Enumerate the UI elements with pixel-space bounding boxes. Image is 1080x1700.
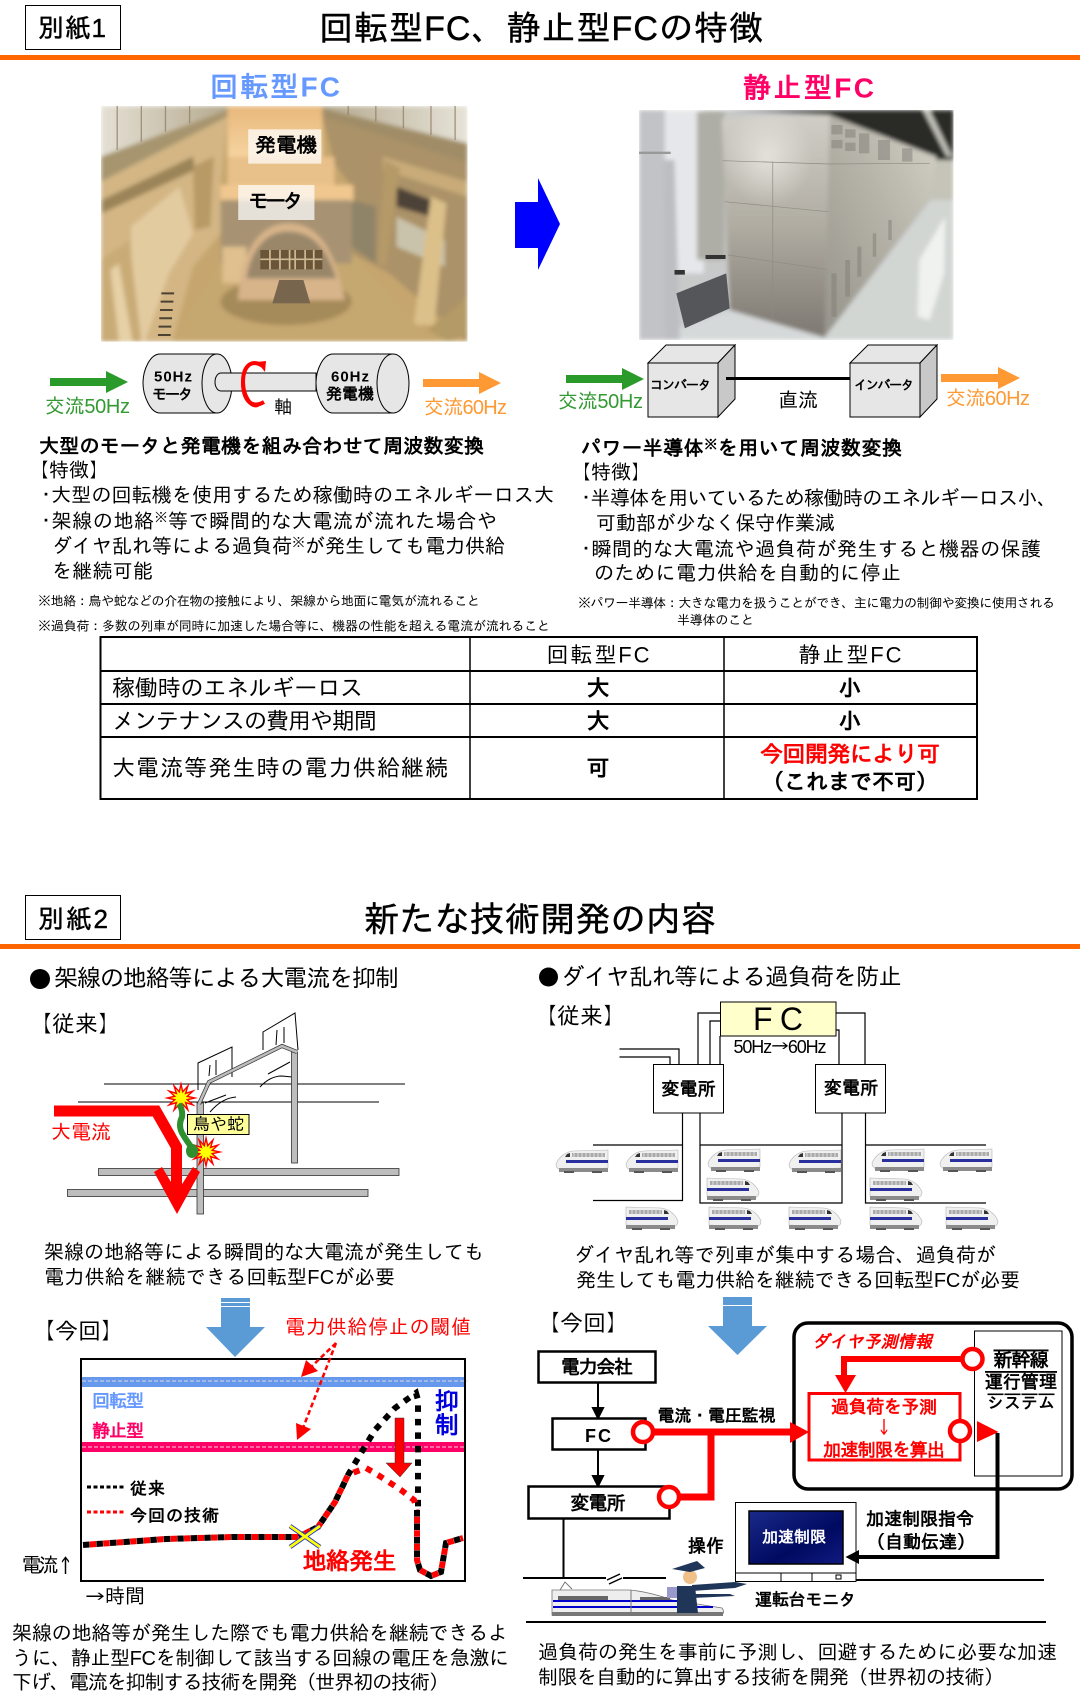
arrow: 60Hz output (941, 367, 1020, 389)
comparison table: 小 (838, 675, 862, 701)
label: power-stop threshold: 電力供給停止の閾値 (285, 1317, 471, 1339)
label: static type: 静止型 (92, 1421, 144, 1441)
text block: rotary FC features: ･架線の地絡 (41, 511, 154, 533)
label: 60Hz generator (326, 368, 374, 404)
sensor circle: FC (633, 1422, 653, 1442)
label: generator: 発電機 (255, 134, 317, 157)
label: acceleration limit command: （自動伝達） (867, 1532, 975, 1552)
photo: static FC cabinets (639, 107, 953, 340)
heading: rotary FC: 回転型FC (210, 72, 340, 102)
power company box (538, 1352, 656, 1382)
monitoring line (653, 1422, 809, 1497)
chart: current over time (81, 1343, 468, 1581)
label: conventional: 【従来】 (29, 1011, 121, 1037)
label: suppression (435, 1388, 459, 1440)
spark: upper (164, 1081, 198, 1115)
text: need for rotary FC (left): 電力供給を継続できる回転型FCが必要 (44, 1267, 395, 1289)
sheet 1 label (26, 6, 120, 50)
control system frame (794, 1323, 1072, 1489)
footnotes: static FC: ※パワー半導体：大きな電力を扱うことができ、主に電力の制御や変換に使用される (578, 596, 1055, 610)
driver figure (667, 1561, 747, 1613)
spark: lower (189, 1135, 223, 1169)
text block: rotary FC features (29, 435, 554, 583)
rails (68, 1168, 399, 1196)
text: technique (left): 下げ、電流を抑制する技術を開発（世界初の技術） (12, 1672, 449, 1694)
arrow: down (left) (206, 1298, 265, 1357)
text block: static FC features: を用いて周波数変換 (718, 437, 902, 460)
label: 60Hz generator: 発電機 (326, 386, 374, 404)
axis label: time: →時間 (85, 1586, 145, 1608)
footnotes: rotary FC: ※地絡：鳥や蛇などの介在物の接触により、架線から地面に電気が流れること (38, 594, 480, 608)
label: generator (248, 129, 321, 164)
panel: Shinkansen operation system: システム (988, 1396, 1054, 1412)
label: acceleration limit command (866, 1509, 975, 1552)
title: new technology development: 新たな技術開発の内容 (364, 900, 716, 940)
sensor circle: prediction (962, 1349, 982, 1369)
text: need for rotary FC (left) (44, 1242, 484, 1289)
substation right: 変電所 (824, 1078, 878, 1098)
text block: rotary FC features: 【特徴】 (29, 460, 109, 482)
substation box (528, 1486, 670, 1518)
diagram: ground fault on catenary (51, 1013, 405, 1214)
text block: rotary FC features: ※ (292, 534, 305, 550)
right section heading: ダイヤ乱れ等による過負荷を防止 (561, 964, 902, 990)
label: 50Hz to 60Hz: 50Hz→60Hz (734, 1037, 826, 1057)
label: driver monitor: 運転台モニタ (755, 1590, 856, 1610)
label: shaft: 軸 (274, 397, 292, 417)
label: rotary type: 回転型 (92, 1391, 144, 1411)
footnotes: static FC (578, 596, 1055, 628)
label: motor (238, 185, 314, 220)
substation left: 変電所 (662, 1079, 716, 1099)
comparison table: 静止型FC (798, 642, 902, 668)
diagram: rotary FC motor-generator (45, 354, 507, 419)
arrow: acceleration limit command (858, 1433, 998, 1557)
band: rotary threshold (82, 1377, 468, 1387)
diagram: overload prediction system (523, 1323, 1072, 1622)
label: AC 50Hz: 交流50Hz (558, 391, 643, 413)
text: technique (left): うに、静止型FCを制御して該当する回線の電圧を急激に (12, 1648, 509, 1670)
footnotes: rotary FC (38, 594, 550, 634)
legend: 今回の技術 (130, 1506, 219, 1526)
label: operation: 操作 (688, 1536, 724, 1556)
snake (179, 1104, 198, 1158)
heading: static FC: 静止型FC (743, 72, 874, 104)
text block: static FC features: ※ (704, 436, 717, 452)
arrow: 50Hz input (566, 368, 644, 390)
legend (87, 1480, 219, 1526)
comparison table: メンテナンスの費用や期間 (112, 708, 377, 734)
text block: rotary FC features: が発生しても電力供給 (305, 536, 505, 558)
label: 50Hz motor (152, 368, 193, 404)
feeder and tracks (523, 1519, 1046, 1622)
motor cylinder (143, 354, 232, 413)
label: DC: 直流 (778, 390, 818, 412)
panel: Shinkansen operation system (974, 1331, 1062, 1476)
label: conventional: 【従来】 (534, 1003, 626, 1029)
label: AC 60Hz: 交流60Hz (946, 388, 1030, 410)
trains (556, 1149, 998, 1230)
label: suppression: 制 (435, 1412, 459, 1440)
label: acceleration limit command: 加速制限指令 (866, 1509, 975, 1529)
text block: rotary FC features: ※ (155, 510, 168, 524)
label: this time (right): 【今回】 (537, 1310, 629, 1336)
comparison table: 大 (586, 675, 610, 701)
inverter cube: インバータ (854, 378, 914, 392)
arrow: prediction info (835, 1359, 962, 1393)
band: static threshold (82, 1442, 465, 1452)
text: technique (right) (538, 1642, 1057, 1689)
label: large current: 大電流 (51, 1122, 111, 1144)
text block: rotary FC features: ダイヤ乱れ等による過負荷 (52, 536, 292, 558)
arrow: output to system (977, 1421, 998, 1442)
red box: predict and calculate: 加速制限を算出 (823, 1440, 945, 1460)
diagram: static FC converter-inverter (558, 345, 1030, 417)
text block: static FC features: パワー半導体 (581, 438, 704, 460)
text: need for rotary FC (left): 架線の地絡等による瞬間的な大電流が発生しても (44, 1242, 484, 1264)
label: ground fault occurs: 地絡発生 (302, 1548, 396, 1576)
axis label: current: 電流↑ (22, 1555, 76, 1577)
text block: rotary FC features: 等で瞬間的な大電流が流れた場合や (168, 511, 497, 533)
generator cylinder (316, 354, 409, 413)
shaft (215, 373, 316, 391)
arrow: down (right) (708, 1297, 767, 1355)
FC box: FC (585, 1426, 611, 1446)
inverter cube (850, 345, 937, 417)
catenary poles and beam (197, 1046, 298, 1214)
comparison table: 小 (838, 708, 862, 734)
label: motor: モータ (248, 191, 303, 213)
label: current voltage monitoring: 電流・電圧監視 (658, 1406, 776, 1426)
label: this time (left): 【今回】 (32, 1318, 124, 1344)
label: 60Hz generator: 60Hz (331, 368, 369, 386)
arrow: FC to substation (593, 1450, 603, 1486)
DC link (726, 377, 850, 380)
red box: predict and calculate (809, 1394, 960, 1460)
curve: recovery (both) (417, 1510, 463, 1576)
text: need for rotary FC (right) (574, 1244, 1020, 1292)
label: AC 60Hz: 交流60Hz (424, 397, 507, 419)
sensor circle: output (950, 1421, 970, 1441)
footnotes: rotary FC: ※過負荷：多数の列車が同時に加速した場合等に、機器の性能を超える電流が流れること (38, 618, 550, 634)
sensor circle: substation (659, 1487, 679, 1507)
monitor: 加速制限 (762, 1528, 826, 1546)
text block: static FC features (571, 436, 1057, 585)
arrow: suppress down (386, 1418, 412, 1477)
comparison table: （これまで不可） (762, 770, 938, 794)
converter cube: コンバータ (650, 378, 711, 392)
arrow: company to FC (593, 1383, 603, 1418)
curve: conventional (83, 1393, 418, 1545)
text block: rotary FC features: を継続可能 (52, 561, 153, 583)
sheet 1 label: 別紙1 (38, 13, 106, 43)
power company box: 電力会社 (561, 1358, 633, 1378)
comparison table: 可 (586, 755, 610, 781)
comparison table: 大電流等発生時の電力供給継続 (112, 755, 448, 781)
red box: predict and calculate: 過負荷を予測 (831, 1397, 937, 1417)
rotation arrow (243, 361, 266, 405)
text: need for rotary FC (right): 発生しても電力供給を継続できる回転型FCが必要 (576, 1270, 1020, 1292)
arrow: 60Hz output (423, 372, 501, 394)
label: bird or snake: 鳥や蛇 (193, 1115, 244, 1134)
panel: Shinkansen operation system: 運行管理 (985, 1372, 1057, 1392)
label: timetable prediction: ダイヤ予測情報 (812, 1332, 934, 1352)
text: technique (left): 架線の地絡等が発生した際でも電力供給を継続できるよ (12, 1623, 508, 1645)
FC box (552, 1418, 646, 1450)
red box: predict and calculate: ↓ (875, 1419, 893, 1437)
substation box: 変電所 (570, 1494, 626, 1514)
diagram: FC and substations network (556, 1001, 998, 1230)
FC box: F C (753, 1001, 803, 1037)
converter cube (648, 345, 735, 417)
arrow: 50Hz input (50, 371, 128, 393)
substation right (816, 1064, 886, 1113)
marker: fault point (290, 1526, 320, 1547)
text block: static FC features: のために電力供給を自動的に停止 (594, 563, 901, 585)
panel: Shinkansen operation system: 新幹線 (994, 1350, 1048, 1372)
text block: static FC features: ･半導体を用いているため稼働時のエネルギーロス小、 (581, 488, 1057, 510)
sheet 2 label: 別紙2 (38, 904, 108, 934)
comparison table: 今回開発により可 (760, 741, 940, 767)
text block: static FC features: 可動部が少なく保守作業減 (596, 513, 835, 535)
text block: static FC features: ･瞬間的な大電流や過負荷が発生すると機器の保護 (581, 539, 1041, 561)
text block: static FC features: 【特徴】 (571, 462, 651, 484)
label: 50Hz motor: 50Hz (154, 368, 192, 386)
train: shinkansen (552, 1582, 724, 1616)
arrow head: into monitor (846, 1550, 859, 1564)
comparison table: 稼働時のエネルギーロス (112, 675, 363, 701)
FC box (720, 1001, 836, 1037)
curve: this technology (83, 1468, 417, 1545)
double arrow: thresholds (296, 1343, 336, 1440)
photo: rotary FC machine hall (101, 106, 468, 342)
footnotes: static FC: 半導体のこと (677, 612, 754, 628)
text block: rotary FC features: ･大型の回転機を使用するため稼働時のエネルギーロス大 (41, 485, 554, 507)
label: AC 50Hz: 交流50Hz (45, 396, 130, 418)
substation left (654, 1064, 724, 1113)
monitor (735, 1502, 856, 1582)
legend: 従来 (130, 1480, 165, 1498)
text: technique (right): 過負荷の発生を事前に予測し、回避するために必要な加速 (538, 1642, 1057, 1664)
text block: rotary FC features: 大型のモータと発電機を組み合わせて周波数変換 (39, 435, 484, 458)
text: need for rotary FC (right): ダイヤ乱れ等で列車が集中する場合、過負荷が (574, 1244, 996, 1267)
label: suppression: 抑 (435, 1388, 459, 1416)
title: features of rotary and static FC: 回転型FC、静止型FCの特徴 (319, 10, 763, 48)
text: technique (right): 制限を自動的に算出する技術を開発（世界初の技術） (538, 1667, 1004, 1689)
arrow: large current (54, 1111, 200, 1214)
arrow: rotary to static (515, 178, 560, 270)
label: 50Hz motor: モータ (152, 386, 193, 404)
comparison table: 大 (586, 708, 610, 734)
text: technique (left) (12, 1623, 509, 1694)
sheet 2 label (26, 896, 120, 940)
comparison table: 回転型FC (546, 642, 650, 668)
left section heading: 架線の地絡等による大電流を抑制 (54, 966, 399, 992)
comparison table (100, 637, 977, 799)
